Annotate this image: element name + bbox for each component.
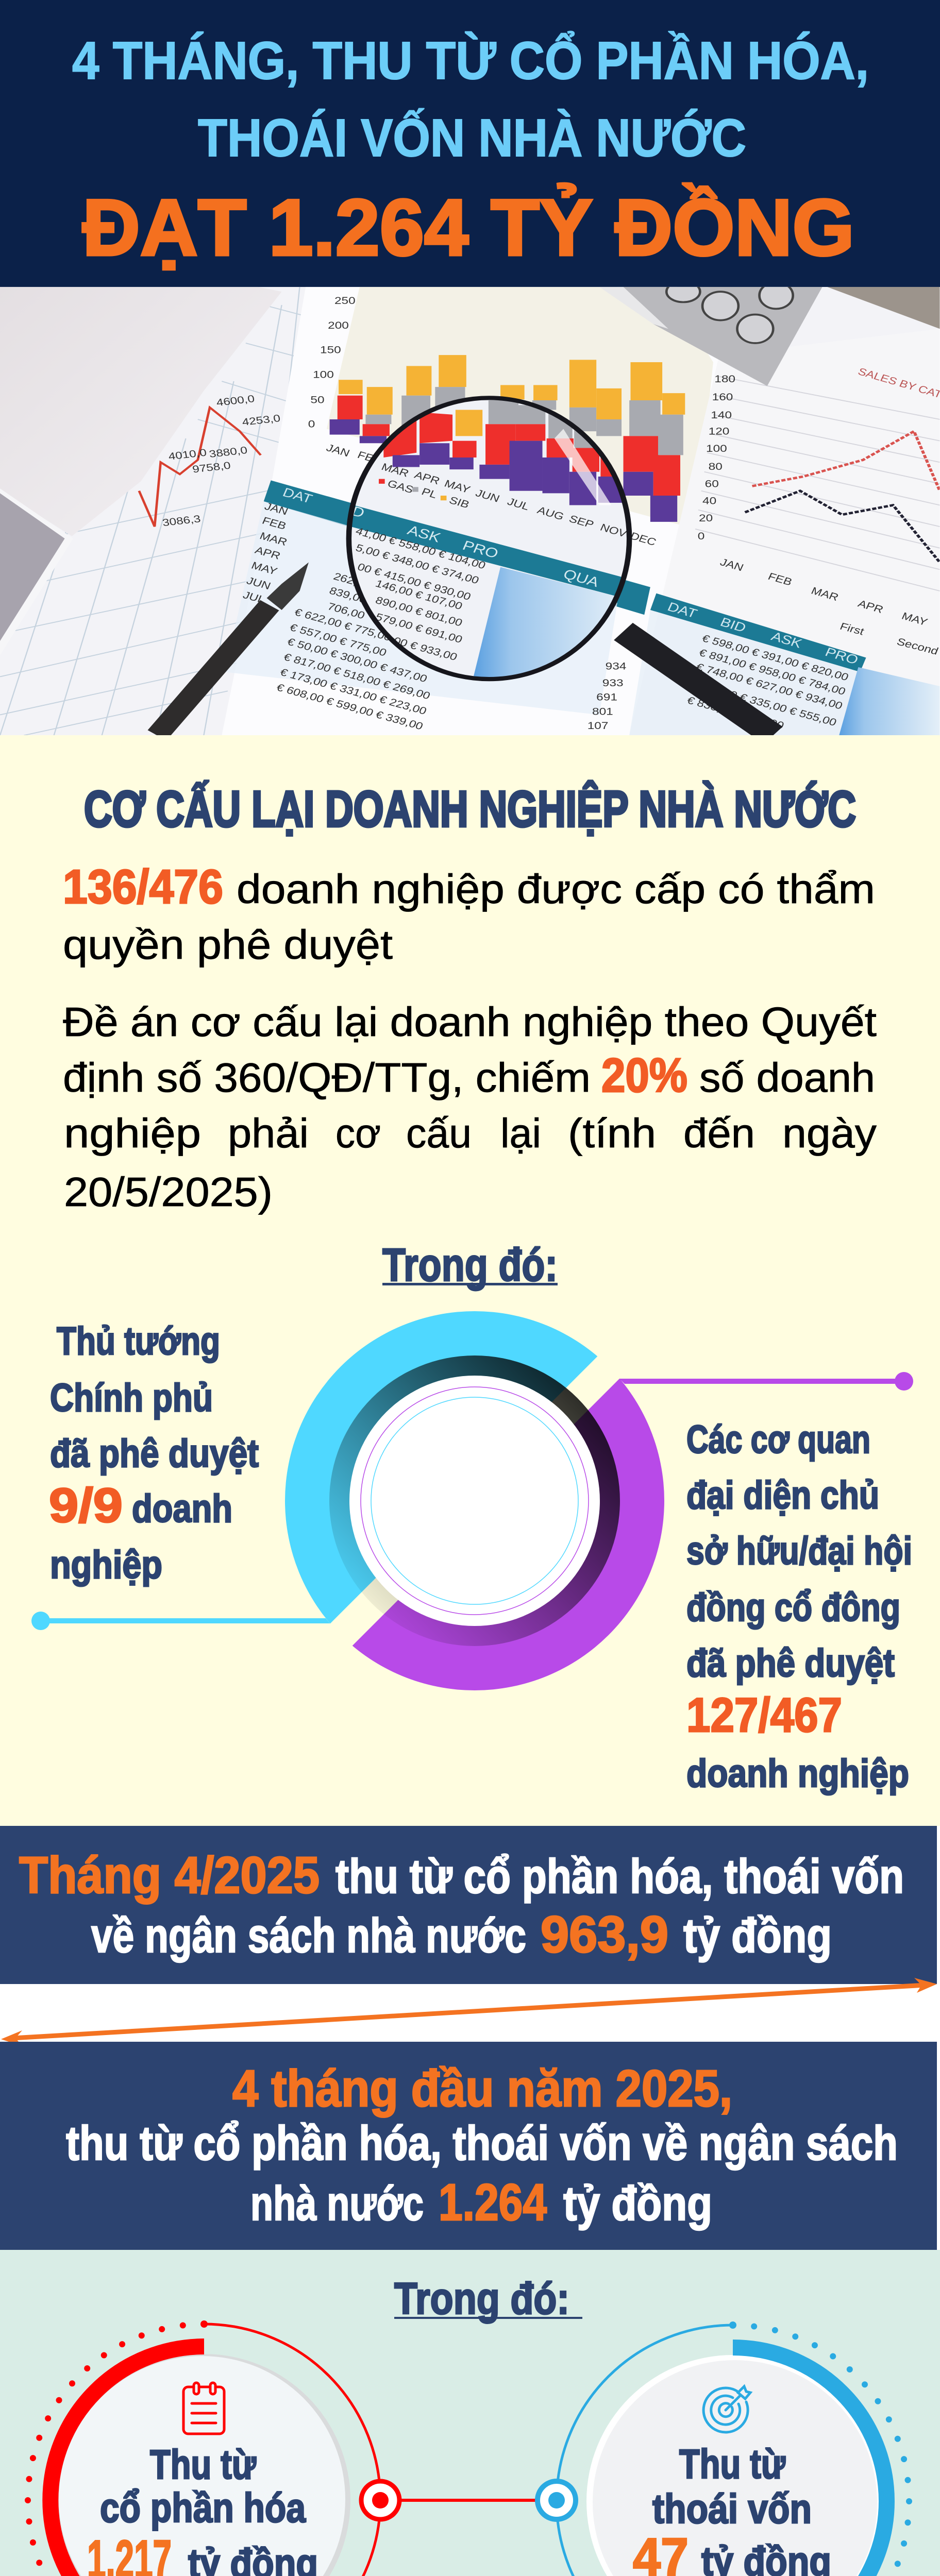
label: thủ tướng chính phủ: Thủ tướng xyxy=(57,1319,220,1363)
magnifier lens: 00 € 933,00 xyxy=(392,635,459,663)
photo: magnifying glass over financial charts: MAY xyxy=(249,560,279,577)
arrow: double-headed orange xyxy=(1,1978,937,2046)
photo: magnifying glass over financial charts: PRO xyxy=(823,645,861,667)
magnifier lens: 890,00 € 801,00 xyxy=(374,594,464,629)
text xyxy=(633,2441,831,2576)
photo: magnifying glass over financial charts: € 598,00 € 391,00 € 820,00 xyxy=(700,632,850,683)
photo: magnifying glass over financial charts: BID xyxy=(718,615,748,635)
magnifier lens: SEP xyxy=(567,513,596,530)
photo: magnifying glass over financial charts: 160 xyxy=(712,391,733,402)
photo: magnifying glass over financial charts: 60 xyxy=(705,478,719,489)
photo: magnifying glass over financial charts: APR xyxy=(253,544,282,562)
magnifier lens: 00 € 415,00 € 930,00 xyxy=(356,561,473,602)
icon: notepad xyxy=(183,2383,224,2434)
photo: magnifying glass over financial charts: 706,00 xyxy=(326,601,367,621)
label: thủ tướng chính phủ: đã phê duyệt xyxy=(50,1432,259,1476)
magnifier lens: AUG xyxy=(535,504,566,522)
magnifier lens: APR xyxy=(413,469,442,487)
photo: magnifying glass over financial charts: € 156,00 € 335,00 € 555,00 xyxy=(689,677,838,728)
label: thủ tướng chính phủ: 9/9 xyxy=(49,1478,123,1532)
photo: magnifying glass over financial charts: 4010,0 xyxy=(167,447,208,462)
label: các cơ quan đại diện: doanh nghiệp xyxy=(686,1752,909,1795)
banner: 4 tháng đầu năm 2025: nhà nước xyxy=(250,2176,424,2230)
banner: tháng 4/2025: Tháng 4/2025 xyxy=(19,1846,320,1904)
magnifier lens: JUN xyxy=(474,487,501,504)
photo: magnifying glass over financial charts: € 748,00 € 627,00 € 934,00 xyxy=(694,661,845,711)
photo: magnifying glass over financial charts: 140 xyxy=(711,410,732,421)
magnifier lens: 41,00 € 558,00 € 104,00 xyxy=(354,525,488,571)
photo: magnifying glass over financial charts: 262,00 xyxy=(332,570,373,591)
photo: magnifying glass over financial charts: 120 xyxy=(709,426,729,437)
photo: magnifying glass over financial charts: 933 xyxy=(602,677,624,688)
title line 3: ĐẠT 1.264 TỶ ĐỒNG xyxy=(82,182,854,272)
photo: magnifying glass over financial charts: € 173,00 € 331,00 € 223,00 xyxy=(278,666,428,717)
magnifier lens: 146,00 € 107,00 xyxy=(374,578,464,612)
label: thủ tướng chính phủ xyxy=(49,1319,259,1587)
label: các cơ quan đại diện: Các cơ quan xyxy=(686,1418,870,1462)
label: thủ tướng chính phủ: Chính phủ xyxy=(50,1376,213,1420)
photo: magnifying glass over financial charts: 80 xyxy=(709,461,723,472)
photo: magnifying glass over financial charts: 0 xyxy=(698,530,704,542)
photo: magnifying glass over financial charts: APR xyxy=(856,598,885,615)
banner: 4 tháng đầu năm 2025: 1.264 xyxy=(439,2174,547,2231)
label: các cơ quan đại diện xyxy=(686,1418,912,1795)
photo: magnifying glass over financial charts: 0 xyxy=(308,418,315,430)
text: cổ phần hóa xyxy=(100,2485,306,2531)
photo: magnifying glass over financial charts: JUN xyxy=(245,575,273,592)
photo: magnifying glass over financial charts: DEC xyxy=(628,530,658,548)
photo: magnifying glass over financial charts xyxy=(0,281,940,735)
banner: 4 tháng đầu năm 2025 xyxy=(0,2042,937,2250)
banner: 4 tháng đầu năm 2025: tỷ đồng xyxy=(563,2176,712,2230)
magnifier lens xyxy=(352,400,627,677)
photo: magnifying glass over financial charts: € 817,00 € 518,00 € 269,00 xyxy=(282,651,432,702)
photo: magnifying glass over financial charts: DAT xyxy=(665,599,700,621)
paragraph đề án: cấu xyxy=(406,1110,472,1156)
banner: 4 tháng đầu năm 2025: 4 tháng đầu năm 2025, xyxy=(232,2060,732,2117)
magnifier lens: MAY xyxy=(443,478,472,496)
paragraph đề án xyxy=(63,999,877,1215)
photo: magnifying glass over financial charts: € 50,00 € 300,00 € 437,00 xyxy=(286,636,429,685)
title line 2: THOÁI VỐN NHÀ NƯỚC xyxy=(198,108,746,167)
paragraph 136/476: 136/476 xyxy=(63,860,223,913)
photo: magnifying glass over financial charts: 934 xyxy=(606,660,626,672)
photo: magnifying glass over financial charts: 4600,0 xyxy=(215,393,256,408)
paragraph đề án: (tính xyxy=(568,1110,656,1156)
photo: magnifying glass over financial charts: 9758,0 xyxy=(191,460,231,475)
panel: thu từ cổ phần hóa và đăng ký doanh nghiệp xyxy=(0,2250,940,2576)
text: thoái vốn xyxy=(652,2486,812,2532)
title line 1: 4 THÁNG, THU TỪ CỔ PHẦN HÓA, xyxy=(72,30,869,90)
paragraph đề án: ngày xyxy=(782,1110,877,1156)
label: thủ tướng chính phủ: nghiệp xyxy=(50,1543,162,1587)
banner: tháng 4/2025 xyxy=(0,1826,937,1984)
paragraph đề án: 20% xyxy=(601,1048,687,1102)
photo: magnifying glass over financial charts: 180 xyxy=(714,373,735,384)
banner: tháng 4/2025: tỷ đồng xyxy=(683,1908,832,1962)
photo: magnifying glass over financial charts: 3086,3 xyxy=(161,513,202,529)
banner: tháng 4/2025: 963,9 xyxy=(541,1906,668,1963)
magnifier lens: JUL xyxy=(506,496,531,513)
paragraph 136/476: doanh nghiệp được cấp có thẩm xyxy=(237,866,875,912)
photo: magnifying glass over financial charts: MAR xyxy=(258,530,289,548)
photo: magnifying glass over financial charts: 107 xyxy=(588,720,608,732)
photo: magnifying glass over financial charts: 250 xyxy=(334,295,356,307)
photo: magnifying glass over financial charts: € 836,00 € 386,00 xyxy=(685,694,786,731)
paragraph 136/476 xyxy=(63,860,875,968)
sub-heading trong đó: Trong đó: xyxy=(382,1240,558,1291)
text: Thu từ xyxy=(150,2442,256,2487)
photo: magnifying glass over financial charts: € 557,00 € 775,00 xyxy=(288,621,389,658)
donut chart xyxy=(31,1311,913,1690)
photo: magnifying glass over financial charts: 839,00 xyxy=(328,585,368,605)
paragraph đề án: đến xyxy=(683,1110,755,1156)
panel: cơ cấu lại doanh nghiệp nhà nước xyxy=(0,735,940,1826)
paragraph đề án: 20/5/2025) xyxy=(64,1169,273,1215)
text: Thu từ xyxy=(679,2441,785,2487)
magnifier lens: 5,00 € 348,00 € 374,00 xyxy=(354,542,481,586)
icon: target xyxy=(703,2386,750,2432)
paragraph 136/476: quyền phê duyệt xyxy=(63,922,393,968)
photo: magnifying glass over financial charts: € 622,00 € 775,00 xyxy=(293,606,393,643)
photo: magnifying glass over financial charts: JUL xyxy=(241,589,267,605)
photo: magnifying glass over financial charts: FEB xyxy=(260,515,288,532)
paragraph đề án: số doanh xyxy=(699,1055,875,1100)
photo: magnifying glass over financial charts: Second xyxy=(895,636,940,657)
photo: magnifying glass over financial charts: JAN xyxy=(263,500,290,517)
photo: magnifying glass over financial charts: MAY xyxy=(900,610,930,628)
magnifier lens: NOV xyxy=(598,521,629,539)
photo: magnifying glass over financial charts: 100 xyxy=(313,369,334,380)
photo: magnifying glass over financial charts: 100 xyxy=(706,443,727,454)
photo: magnifying glass over financial charts: € 891,00 € 958,00 € 784,00 xyxy=(697,647,847,697)
photo: magnifying glass over financial charts: JAN xyxy=(325,442,351,459)
photo: magnifying glass over financial charts: 150 xyxy=(320,344,341,355)
connector line xyxy=(401,2499,536,2502)
photo: magnifying glass over financial charts: FEB xyxy=(356,449,383,466)
magnifier lens: 579,00 € 691,00 xyxy=(374,611,464,645)
magnifier lens: D xyxy=(349,503,367,521)
label: các cơ quan đại diện: đại diện chủ xyxy=(686,1473,879,1517)
paragraph đề án: lại xyxy=(500,1110,541,1156)
label: các cơ quan đại diện: đồng cổ đông xyxy=(686,1586,900,1630)
photo: magnifying glass over financial charts: 691 xyxy=(596,691,617,703)
label: các cơ quan đại diện: đã phê duyệt xyxy=(686,1641,895,1685)
photo: magnifying glass over financial charts: JAN xyxy=(718,556,745,573)
paragraph đề án: phải xyxy=(228,1110,309,1156)
paragraph đề án: định số 360/QĐ/TTg, chiếm xyxy=(63,1055,591,1100)
banner: tháng 4/2025: về ngân sách nhà nước xyxy=(91,1908,526,1962)
photo: magnifying glass over financial charts: 40 xyxy=(702,495,716,506)
paragraph đề án: Đề án cơ cấu lại doanh nghiệp theo Quyết xyxy=(63,999,877,1045)
magnifier lens: GAS xyxy=(385,478,415,496)
circle: thu từ cổ phần hóa xyxy=(28,2320,399,2576)
label: thủ tướng chính phủ: doanh xyxy=(132,1487,232,1531)
label: các cơ quan đại diện: 127/467 xyxy=(686,1688,842,1742)
magnifier lens: PL xyxy=(420,486,439,500)
photo: magnifying glass over financial charts: 20 xyxy=(699,512,713,523)
magnifier lens: PRO xyxy=(460,538,501,562)
photo: magnifying glass over financial charts: 200 xyxy=(328,320,349,331)
circle: thu từ thoái vốn xyxy=(538,2321,909,2576)
paragraph đề án: nghiệp xyxy=(64,1110,201,1156)
photo: magnifying glass over financial charts: ASK xyxy=(769,629,804,651)
photo: magnifying glass over financial charts: MAR xyxy=(809,585,841,603)
photo: magnifying glass over financial charts: First xyxy=(838,620,866,637)
photo: magnifying glass over financial charts: DAT xyxy=(280,485,315,506)
paragraph đề án: cơ xyxy=(335,1110,381,1156)
magnifier lens: MAR xyxy=(380,461,411,479)
photo: magnifying glass over financial charts: 4253,0 xyxy=(241,412,281,428)
magnifier lens: SIB xyxy=(447,494,471,511)
magnifier lens: QUA xyxy=(561,566,601,590)
photo: magnifying glass over financial charts: € 608,00 € 599,00 € 339,00 xyxy=(275,682,425,732)
photo: magnifying glass over financial charts: 50 xyxy=(310,394,325,405)
magnifier lens: ASK xyxy=(405,522,443,546)
text xyxy=(87,2442,318,2576)
header banner xyxy=(0,0,940,287)
photo: magnifying glass over financial charts: FEB xyxy=(766,570,794,588)
sub-heading trong đó: Trong đó: xyxy=(394,2274,569,2324)
photo: magnifying glass over financial charts: 3880,0 xyxy=(208,444,248,460)
photo: magnifying glass over financial charts: 801 xyxy=(592,706,613,717)
